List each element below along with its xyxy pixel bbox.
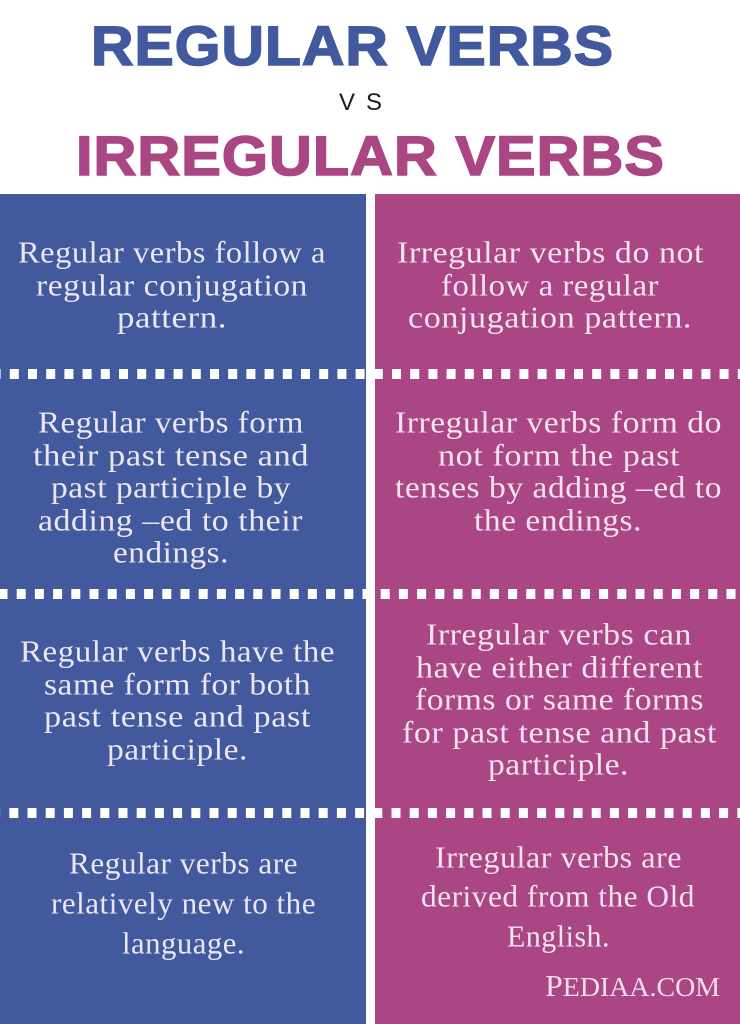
text: regular row 3: past tense and past — [44, 699, 311, 734]
text: regular row 3 — [20, 634, 335, 767]
text: regular row 3: same form for both — [44, 667, 311, 702]
text: regular row 1 — [18, 235, 326, 335]
text: regular row 2: Regular verbs form — [38, 405, 304, 440]
text: regular row 4: relatively new to the — [51, 886, 316, 921]
text: regular row 3: Regular verbs have the — [20, 634, 335, 669]
text: irregular row 4: derived from the Old — [421, 879, 695, 914]
text: irregular row 1 — [397, 235, 704, 335]
source credit: Pediaa.com: PEDIAA.COM — [545, 968, 720, 1003]
text: regular row 2 — [33, 405, 309, 570]
text: regular row 2: their past tense and — [33, 438, 309, 473]
text: regular row 3: participle. — [107, 732, 248, 767]
text: irregular row 4: English. — [507, 919, 610, 954]
text: regular row 4: language. — [122, 926, 245, 961]
text: irregular row 4: Irregular verbs are — [435, 840, 682, 875]
text: irregular row 4 — [421, 840, 695, 954]
text: regular row 1: Regular verbs follow a — [18, 235, 326, 270]
text: regular row 2: adding –ed to their — [38, 503, 303, 538]
text: regular row 1: regular conjugation — [36, 268, 308, 303]
title: irregular verbs: IRREGULAR VERBS — [76, 124, 665, 187]
vs label: VS — [339, 89, 382, 116]
text: irregular row 3: Irregular verbs can — [426, 617, 692, 652]
text: regular row 4 — [51, 846, 316, 961]
text: irregular row 2: not form the past — [438, 438, 680, 473]
text: irregular row 3: for past tense and past — [402, 715, 717, 750]
text: regular row 2: endings. — [113, 535, 229, 570]
text: regular row 1: pattern. — [117, 300, 227, 335]
text: regular row 4: Regular verbs are — [69, 846, 298, 881]
text: irregular row 2: tenses by adding –ed to — [395, 470, 722, 505]
title: regular verbs: REGULAR VERBS — [91, 14, 614, 77]
text: regular row 2: past participle by — [51, 470, 291, 505]
text: irregular row 3: have either different — [416, 650, 703, 685]
text: irregular row 1: conjugation pattern. — [408, 300, 692, 335]
panel: irregular verbs column background — [375, 194, 740, 1024]
text: irregular row 2: the endings. — [474, 503, 642, 538]
text: irregular row 3 — [402, 617, 717, 782]
panel: regular verbs column background — [0, 194, 366, 1024]
text: irregular row 2 — [395, 405, 722, 538]
text: irregular row 2: Irregular verbs form do — [395, 405, 722, 440]
text: irregular row 1: Irregular verbs do not — [397, 235, 704, 270]
text: irregular row 1: follow a regular — [441, 268, 659, 303]
text: irregular row 3: participle. — [488, 747, 629, 782]
text: irregular row 3: forms or same forms — [415, 682, 704, 717]
